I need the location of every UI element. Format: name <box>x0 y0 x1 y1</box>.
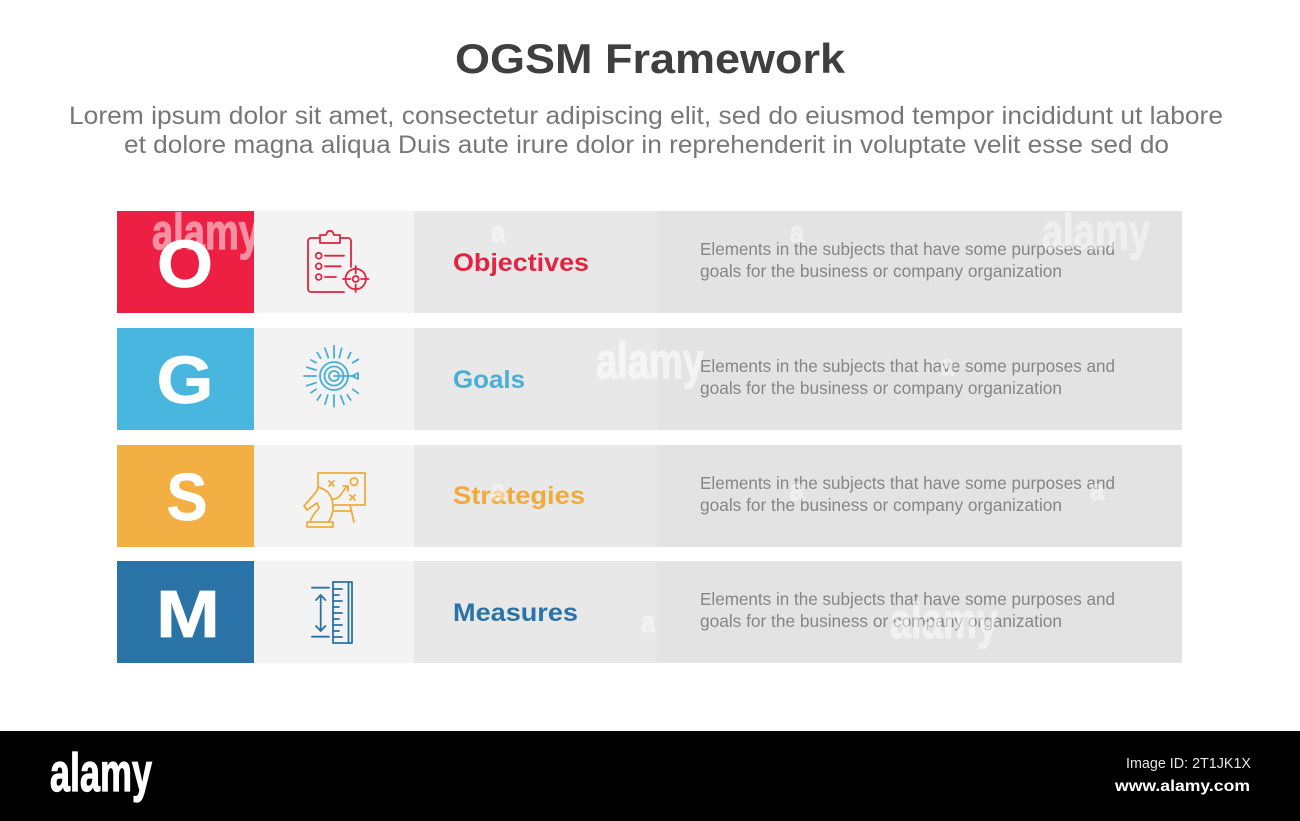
watermarks: a <box>491 216 505 249</box>
letter tile S <box>117 445 254 547</box>
description <box>700 473 1115 515</box>
footer bar <box>0 731 1300 821</box>
description: Elements in the subjects that have some purposes and <box>700 356 1115 376</box>
watermarks: a <box>790 216 804 249</box>
letter tile G: G <box>156 343 214 418</box>
description: goals for the business or company organization <box>700 495 1062 515</box>
subtitle text block: Lorem ipsum dolor sit amet, consectetur adipiscing elit, sed do eiusmod tempor incididunt ut labore <box>69 102 1223 130</box>
image ID: Image ID: 2T1JK1X <box>1126 755 1251 772</box>
description <box>700 589 1115 631</box>
label: Strategies: Strategies <box>453 482 585 510</box>
letter tile S: S <box>166 460 208 535</box>
watermarks: a <box>1090 474 1104 507</box>
description: goals for the business or company organization <box>700 378 1062 398</box>
label: Goals: Goals <box>453 366 525 394</box>
panel: measures row <box>117 561 1182 663</box>
label: Measures: Measures <box>453 599 578 627</box>
label: Objectives: Objectives <box>453 249 589 277</box>
description: goals for the business or company organization <box>700 611 1062 631</box>
description: Elements in the subjects that have some purposes and <box>700 239 1115 259</box>
panel: objectives row <box>117 204 1182 313</box>
description <box>700 356 1115 398</box>
watermarks: alamy <box>890 593 998 649</box>
description <box>700 239 1115 281</box>
description: Elements in the subjects that have some purposes and <box>700 589 1115 609</box>
subtitle text block <box>69 102 1223 159</box>
letter tile M: M <box>156 577 220 652</box>
watermarks: a <box>940 349 954 382</box>
footer logo: alamy <box>50 743 152 803</box>
icon: chess knight and strategy board <box>304 473 365 527</box>
icon: clipboard with target <box>308 231 368 292</box>
letter tile M <box>117 561 254 663</box>
subtitle text block: et dolore magna aliqua Duis aute irure dolor in reprehenderit in voluptate velit esse sed do <box>124 131 1169 159</box>
icon: ruler with height arrow <box>312 582 352 643</box>
letter tile O <box>117 211 254 313</box>
icon: target with rays <box>304 346 358 407</box>
title: OGSM Framework <box>455 35 846 82</box>
watermarks: alamy <box>1042 204 1150 260</box>
panel: goals row <box>117 328 1182 430</box>
letter tile G <box>117 328 254 430</box>
letter tile O: alamy <box>152 204 260 260</box>
description: goals for the business or company organization <box>700 261 1062 281</box>
watermarks: alamy <box>596 333 704 389</box>
letter tile O: O <box>157 227 213 302</box>
watermarks: a <box>641 606 655 639</box>
panel: strategies row <box>117 445 1182 547</box>
watermarks <box>491 204 1150 649</box>
watermarks: a <box>491 474 505 507</box>
description: Elements in the subjects that have some purposes and <box>700 473 1115 493</box>
watermarks: a <box>790 474 804 507</box>
website: www.alamy.com <box>1114 778 1250 795</box>
